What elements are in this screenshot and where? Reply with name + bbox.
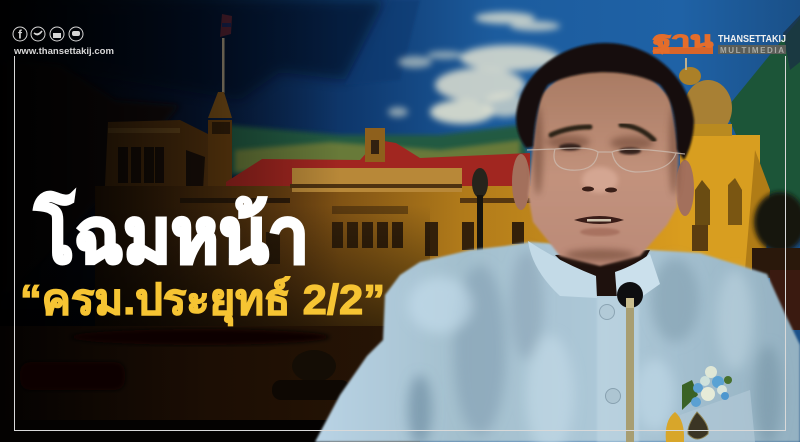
lamp post bbox=[472, 168, 488, 255]
brand name: THANSETTAKIJ bbox=[718, 34, 786, 45]
headline: โฉมหน้า bbox=[34, 191, 309, 279]
parliament building bbox=[95, 14, 800, 330]
boutonniere bbox=[682, 366, 732, 410]
microphone bbox=[617, 282, 643, 442]
glasses bbox=[527, 148, 685, 172]
man in suit bbox=[315, 43, 800, 442]
central golden wing bbox=[95, 128, 760, 326]
clouds bbox=[388, 12, 560, 124]
pocket bbox=[680, 390, 755, 442]
dark wash over building bbox=[0, 0, 340, 442]
logo bbox=[653, 29, 786, 55]
red roof bbox=[226, 140, 530, 190]
nose bbox=[582, 167, 618, 193]
website url: www.thansettakij.com bbox=[13, 46, 114, 57]
jacket bbox=[315, 242, 800, 442]
ears bbox=[512, 154, 694, 216]
badges bbox=[666, 412, 708, 442]
lawn and hedges bbox=[0, 326, 420, 442]
neck shadow bbox=[555, 250, 650, 296]
dark facet top right bbox=[783, 15, 800, 70]
face bbox=[528, 66, 678, 266]
domed wing bbox=[679, 58, 770, 285]
multimedia band: MULTIMEDIA bbox=[720, 46, 784, 55]
sub headline: “ครม.ประยุทธ์ 2/2” bbox=[20, 276, 385, 326]
button bbox=[600, 304, 614, 320]
green facet right bbox=[725, 18, 800, 210]
social icons: f bbox=[18, 28, 23, 42]
face shading bbox=[533, 105, 679, 261]
dark trees right bbox=[752, 192, 800, 330]
green horizon band bbox=[228, 125, 530, 175]
eyebrows bbox=[551, 125, 654, 140]
placket bbox=[597, 296, 639, 442]
eyes bbox=[559, 144, 641, 154]
social icons bbox=[13, 27, 83, 42]
lower wash bbox=[0, 205, 430, 330]
collar bbox=[528, 241, 660, 298]
lower button bbox=[606, 388, 620, 404]
flag and flagpole bbox=[220, 14, 232, 93]
mouth bbox=[574, 216, 624, 236]
logo mark: ฐาน bbox=[653, 29, 714, 54]
left tower bbox=[100, 92, 232, 290]
lattice windows bbox=[228, 206, 524, 264]
hair bbox=[516, 43, 694, 160]
